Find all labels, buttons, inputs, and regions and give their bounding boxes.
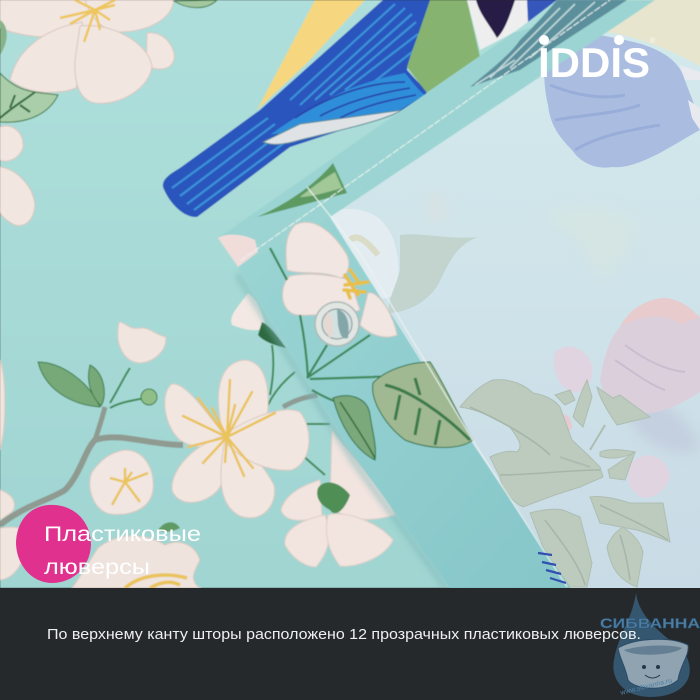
logo: IDDIS: ® [650, 37, 656, 45]
calyx: green flower base [317, 482, 350, 513]
leaf on hem [257, 163, 347, 217]
flower: bottom blossom [72, 522, 200, 588]
bud: green [141, 389, 157, 405]
blue print marks at seam [538, 553, 566, 583]
illustration: blue bird wing and tail [163, 0, 432, 217]
panel: sheer translucent fabric [330, 0, 700, 588]
leaves on branch [38, 362, 104, 407]
stamens on flap flower [344, 270, 368, 298]
logo: IDDIS: IDDIS [538, 39, 650, 86]
badge title: Пластиковые [44, 523, 201, 546]
badge title: люверсы [44, 556, 150, 579]
feather strokes on hem [475, 2, 595, 85]
hem band [218, 0, 655, 267]
see-through: cream bird body [593, 0, 700, 66]
shadow: under folded flap [234, 272, 450, 588]
badge: pink blob [16, 505, 91, 583]
watermark: Sibvanna logo: www.sibvanna.ru [619, 677, 673, 697]
see-through: white flower [330, 209, 398, 299]
flower: small petal near fold [231, 293, 266, 330]
flower: right blossom on fabric [281, 430, 395, 567]
stems on flap [270, 248, 430, 405]
watermark: Sibvanna logo: СИБВАННА [600, 615, 700, 631]
panel: folded hem and corner flap [218, 0, 655, 588]
flower fragment on hem corner [218, 235, 258, 267]
leaf: top left green leaves [0, 0, 217, 122]
flower: bottom left blossom [0, 360, 29, 580]
illustration: green bird back [407, 0, 480, 93]
leaf small green on flap [333, 396, 375, 460]
see-through: stamens [350, 238, 378, 255]
see-through: rose [600, 298, 700, 413]
stamens: top left blossom [60, 0, 115, 42]
leaf large green on flap [373, 362, 473, 448]
grommet eyelet [315, 302, 359, 346]
see-through: rose buds [554, 346, 670, 498]
flower on flap [282, 222, 397, 337]
see-through: blue wing [544, 31, 700, 168]
bud: pale blossom [118, 322, 166, 363]
see-through: leaf upper [389, 234, 478, 313]
panel: dark caption band [0, 588, 700, 700]
see-through: leaves and stems [460, 380, 670, 587]
caption text: По верхнему канту шторы расположено 12 прозрачных пластиковых люверсов. [47, 627, 641, 643]
calyx: dark green near fold [258, 322, 286, 348]
illustration: yellow bird belly [257, 0, 365, 110]
leaf highlight on hem [300, 172, 342, 197]
stitches [240, 0, 610, 587]
see-through: leaf veins [470, 407, 668, 585]
see-through: faint shapes [425, 190, 700, 453]
watermark: Sibvanna logo [600, 593, 700, 697]
flower: small blossom [90, 450, 153, 514]
stamens: large central blossom [183, 380, 275, 476]
stems and branch on fabric [0, 345, 330, 545]
feather print on hem [470, 0, 627, 87]
illustration: bird head markings [467, 0, 557, 50]
flower: large central blossom [165, 360, 309, 518]
flower: top left blossom [0, 0, 174, 226]
